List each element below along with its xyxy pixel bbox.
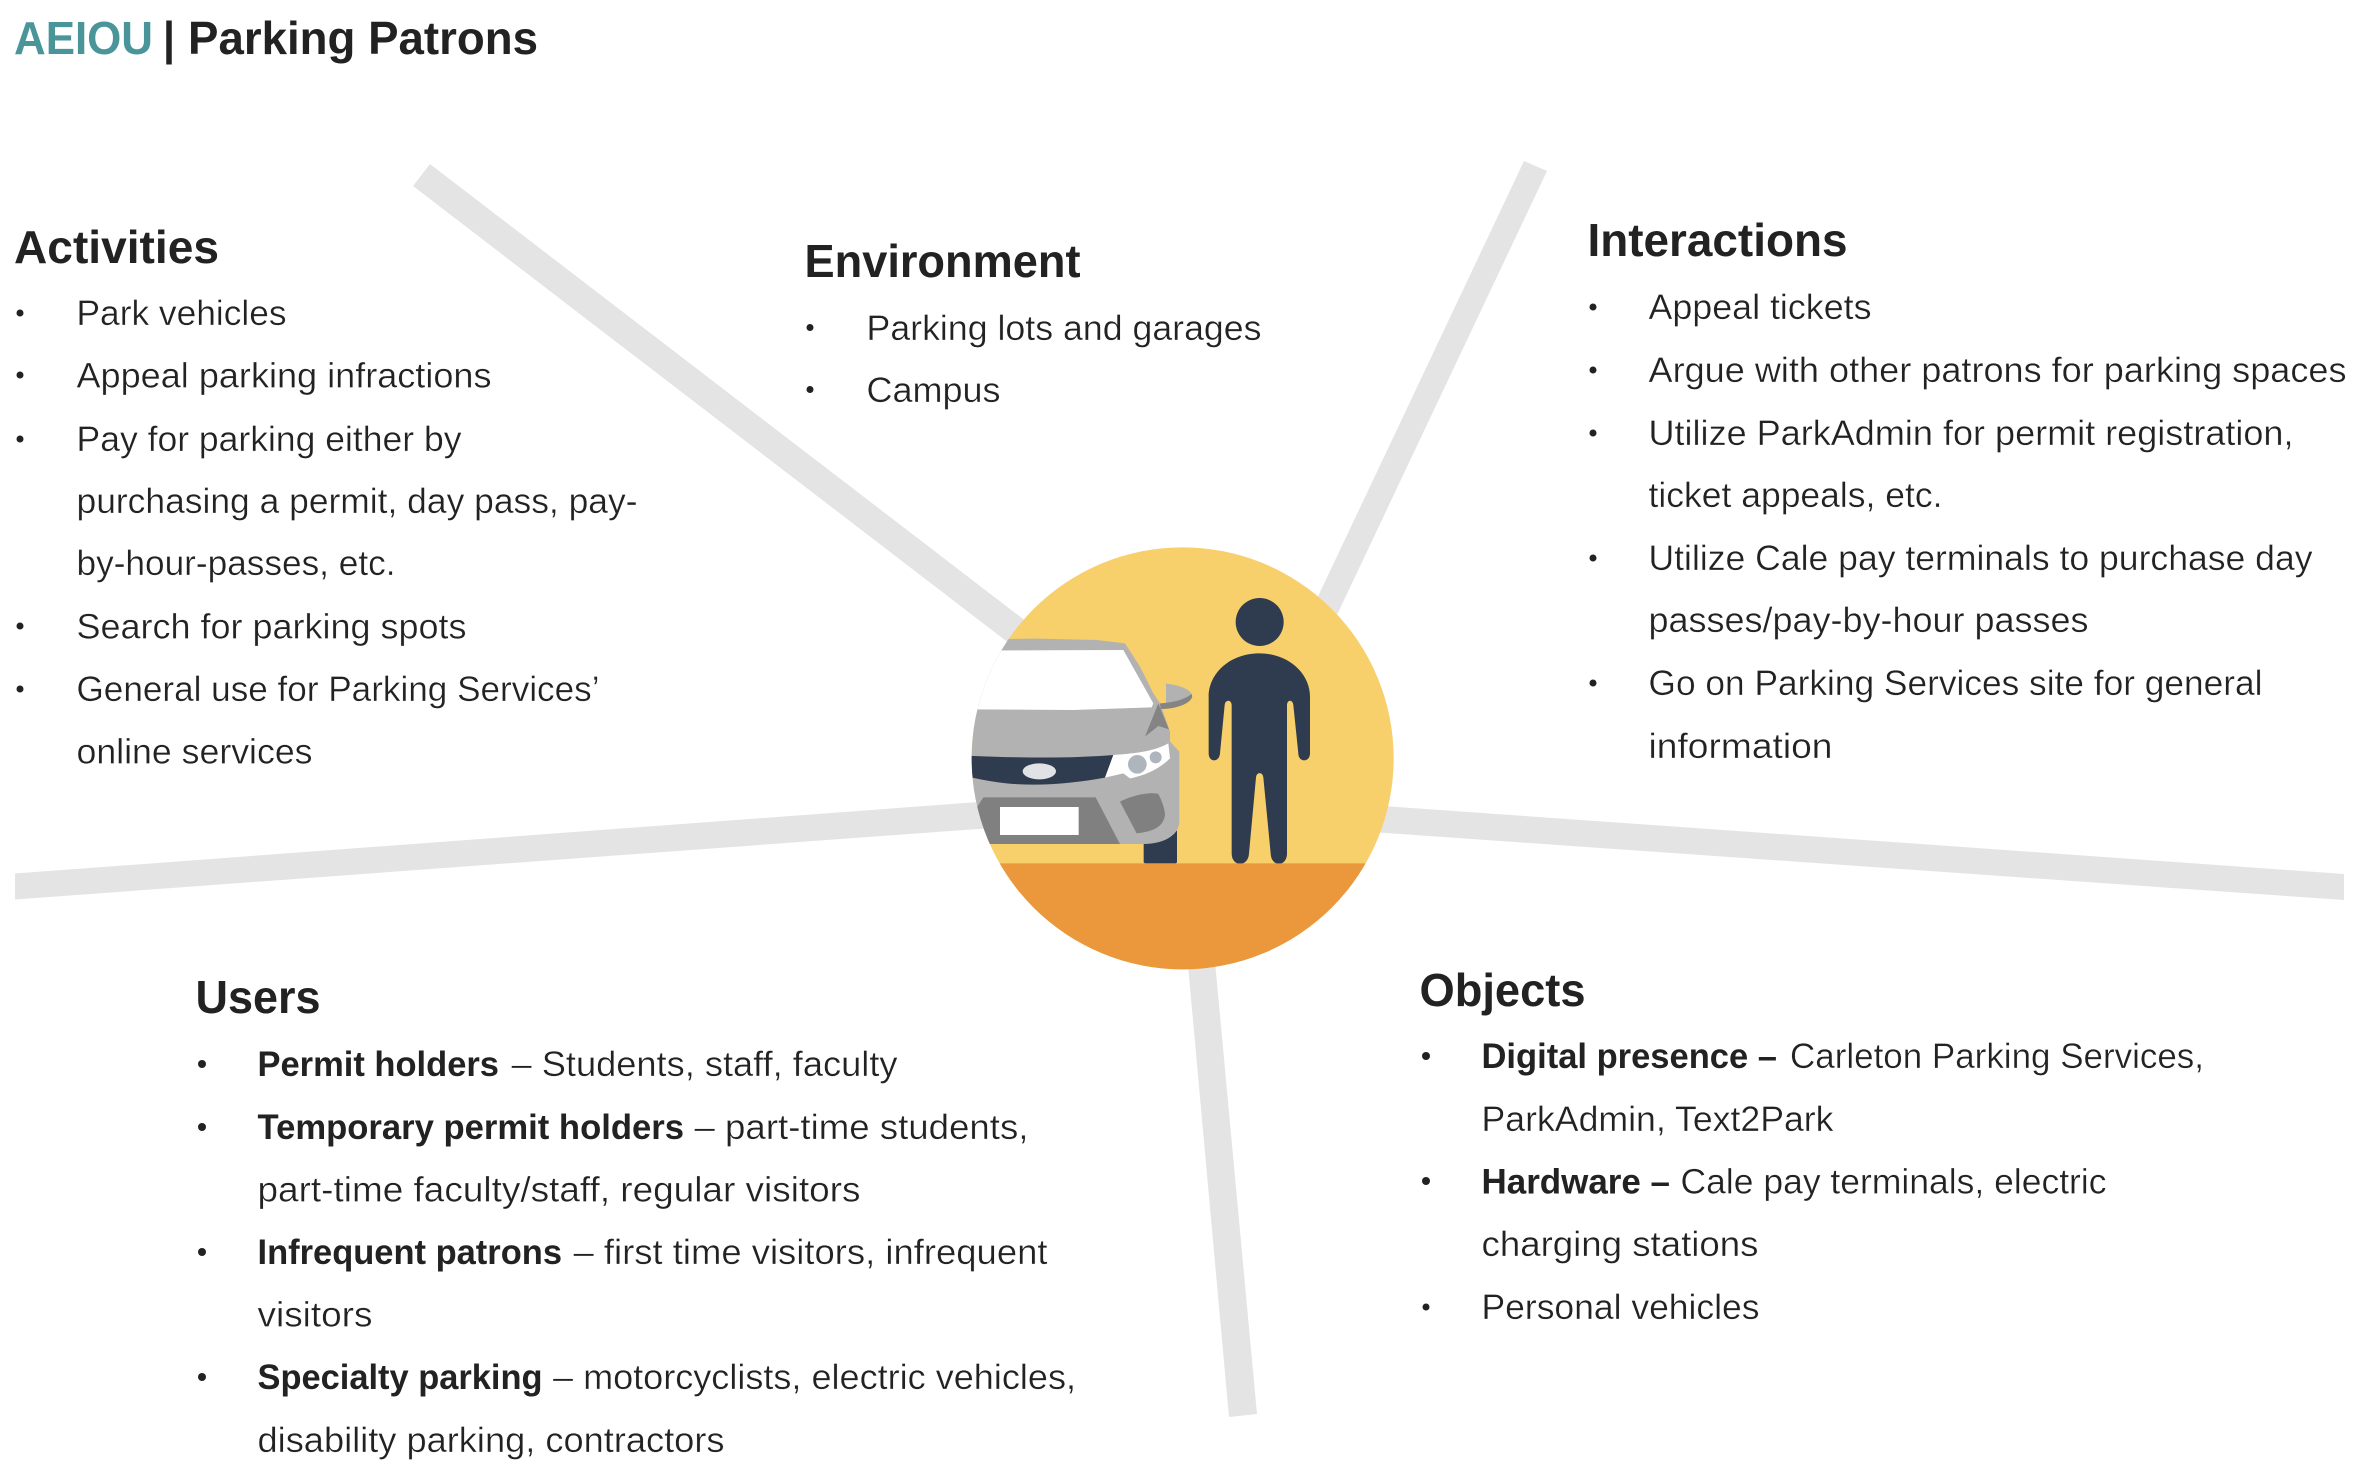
icon: car and person in circle bbox=[972, 547, 1394, 970]
list: users bbox=[198, 1045, 1076, 1460]
panel: activities bbox=[14, 221, 638, 772]
panel: users bbox=[196, 971, 1076, 1460]
list: objects bbox=[1422, 1037, 2204, 1327]
list: environment bbox=[806, 309, 1262, 410]
list: activities: by-hour-passes, etc. bbox=[76, 544, 396, 583]
list: activities: online services bbox=[76, 732, 312, 772]
title: AEIOU bbox=[14, 12, 153, 64]
list: activities: Appeal parking infractions bbox=[76, 356, 492, 396]
list: objects: Hardware – bbox=[1482, 1162, 1670, 1202]
list: interactions: information bbox=[1648, 727, 1832, 766]
list: users: visitors bbox=[258, 1296, 372, 1334]
list: users: Temporary permit holders bbox=[258, 1108, 684, 1147]
list: users: Infrequent patrons bbox=[258, 1233, 562, 1272]
heading: users: Users bbox=[196, 971, 320, 1023]
list: users: – motorcyclists, electric vehicles, bbox=[553, 1358, 1076, 1397]
list: users: – part-time students, bbox=[694, 1108, 1028, 1147]
panel: interactions bbox=[1588, 214, 2346, 766]
list: objects: Digital presence – bbox=[1482, 1037, 1777, 1076]
list: interactions: ticket appeals, etc. bbox=[1648, 476, 1942, 515]
heading: objects: Objects bbox=[1420, 964, 1586, 1016]
ground bbox=[1000, 863, 1366, 970]
list: objects: Personal vehicles bbox=[1482, 1288, 1760, 1327]
list: objects: Carleton Parking Services, bbox=[1790, 1037, 2204, 1076]
list: objects: ParkAdmin, Text2Park bbox=[1482, 1100, 1834, 1139]
icon: person bbox=[1209, 598, 1310, 864]
list: interactions: Utilize ParkAdmin for permit registration, bbox=[1648, 414, 2294, 453]
list: users: – first time visitors, infrequent bbox=[574, 1233, 1048, 1272]
title: | bbox=[163, 12, 175, 64]
list: interactions: Argue with other patrons for parking spaces bbox=[1648, 351, 2346, 390]
heading: interactions: Interactions bbox=[1588, 214, 1848, 266]
list: activities: Park vehicles bbox=[76, 294, 286, 333]
list: users: Specialty parking bbox=[258, 1358, 542, 1397]
list: objects: Cale pay terminals, electric bbox=[1680, 1162, 2106, 1202]
list: interactions bbox=[1590, 288, 2346, 766]
list: environment: Parking lots and garages bbox=[866, 309, 1262, 348]
sun circle bbox=[972, 547, 1394, 969]
icon: car bbox=[960, 639, 1192, 863]
list: interactions: Go on Parking Services site for general bbox=[1648, 664, 2262, 703]
list: activities: Search for parking spots bbox=[76, 608, 466, 646]
list: users: – Students, staff, faculty bbox=[512, 1045, 898, 1084]
title bbox=[14, 12, 538, 64]
heading: environment: Environment bbox=[804, 235, 1080, 287]
title: Parking Patrons bbox=[188, 12, 538, 64]
panel: objects bbox=[1420, 964, 2204, 1327]
panel: environment bbox=[804, 235, 1262, 410]
list: activities: Pay for parking either by bbox=[76, 420, 462, 459]
list: users: part-time faculty/staff, regular visitors bbox=[258, 1170, 860, 1210]
list: users: Permit holders bbox=[258, 1045, 499, 1084]
list: activities: purchasing a permit, day pass, pay- bbox=[76, 482, 638, 521]
heading: activities: Activities bbox=[14, 221, 219, 273]
list: interactions: Utilize Cale pay terminals to purchase day bbox=[1648, 539, 2313, 578]
list: interactions: Appeal tickets bbox=[1648, 288, 1872, 327]
list: activities bbox=[16, 294, 638, 772]
list: interactions: passes/pay-by-hour passes bbox=[1648, 601, 2088, 640]
list: users: disability parking, contractors bbox=[258, 1421, 724, 1460]
list: activities: General use for Parking Services’ bbox=[76, 670, 600, 709]
list: environment: Campus bbox=[866, 371, 1000, 410]
list: objects: charging stations bbox=[1482, 1225, 1758, 1264]
